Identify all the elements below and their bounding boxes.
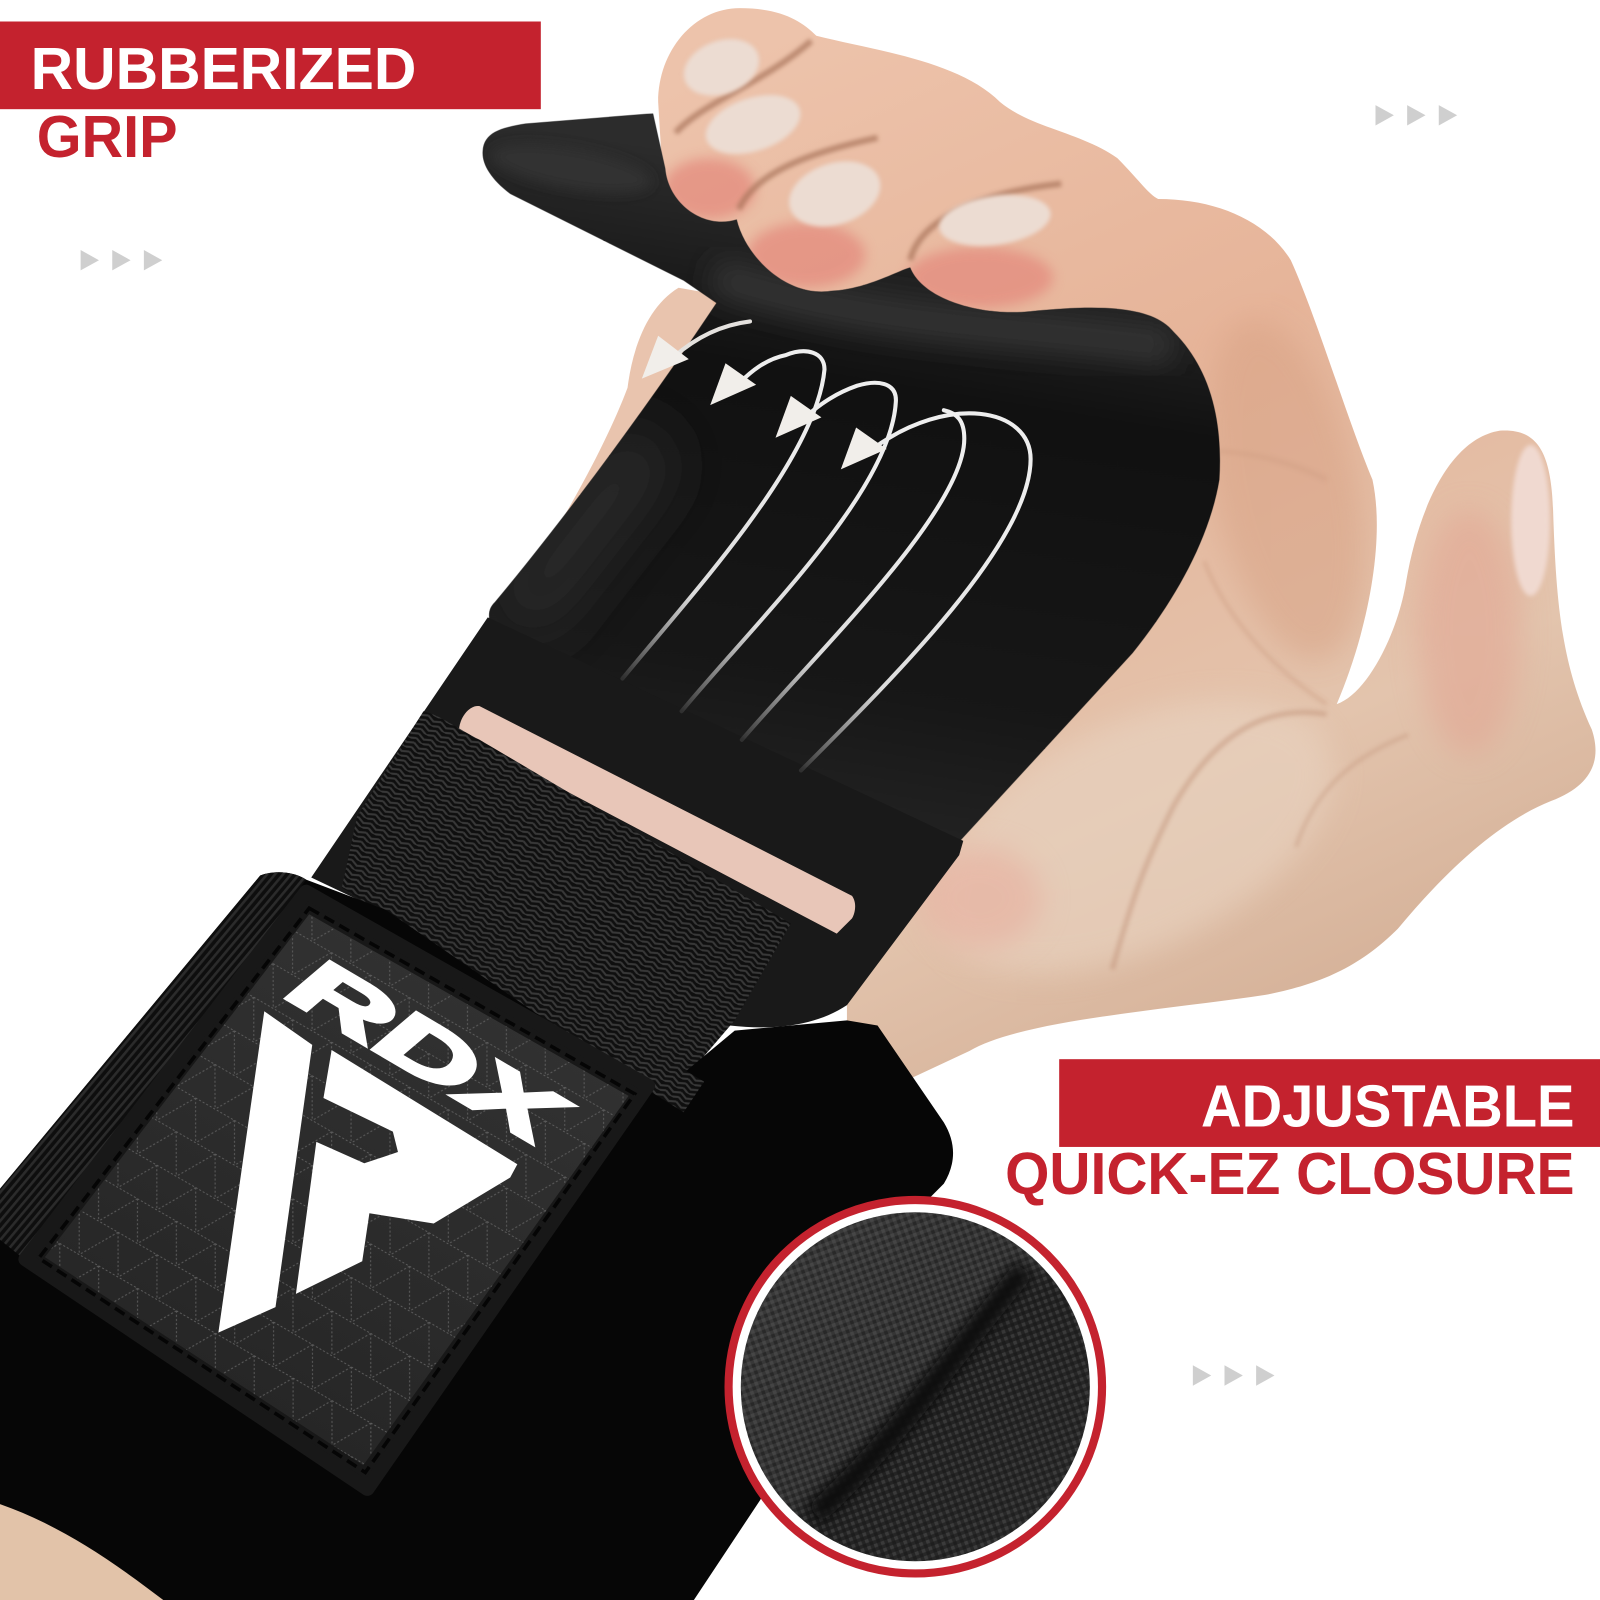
decorative triangles left <box>81 250 162 270</box>
patch face <box>45 914 629 1465</box>
banner text: RUBBERIZED <box>31 35 416 102</box>
decorative triangles bottom right <box>1193 1365 1274 1386</box>
RDX logo patch <box>26 892 648 1489</box>
wrist wrap <box>0 872 953 1600</box>
logo wordmark: RDX <box>277 939 581 1166</box>
finger creases <box>676 41 1061 260</box>
fabric crease <box>815 1269 1024 1514</box>
wrap body <box>0 872 953 1600</box>
banner text: ADJUSTABLE <box>1201 1073 1574 1140</box>
hand and thumb <box>658 8 1596 1080</box>
logo shard <box>218 1011 312 1333</box>
buckle frame <box>311 617 963 1027</box>
curve 2 <box>682 383 896 711</box>
subheading text: QUICK-EZ CLOSURE <box>1005 1140 1574 1207</box>
pad highlights <box>487 134 1173 622</box>
curve 5 <box>673 321 750 357</box>
curve 3 <box>742 410 964 740</box>
stitching <box>39 908 635 1472</box>
fingers behind the pad <box>543 288 724 551</box>
skin shading <box>663 158 1520 1029</box>
heading: adjustable closure <box>1005 1059 1600 1207</box>
fingernails <box>676 29 1550 596</box>
fabric weave <box>741 1212 1090 1561</box>
elastic lower strap <box>342 880 704 1112</box>
red banner <box>1059 1059 1600 1147</box>
decorative triangles top right <box>1376 105 1457 126</box>
webbing strap <box>342 711 791 1092</box>
curve 4 <box>801 413 1031 770</box>
patch border <box>26 892 648 1489</box>
flex motion arrows <box>622 321 1031 770</box>
logo P <box>296 1050 517 1294</box>
elastic band <box>0 872 306 1260</box>
red banner <box>0 21 541 109</box>
heading: rubberized grip <box>0 21 541 170</box>
subheading text: GRIP <box>37 103 178 170</box>
wrist skin <box>0 1490 179 1600</box>
buckle slot <box>459 706 855 934</box>
inset fabric closeup <box>729 1200 1102 1573</box>
arrowheads <box>642 336 887 469</box>
pad body <box>483 113 1220 842</box>
red ring <box>729 1200 1102 1573</box>
rubberized grip pad <box>483 113 1220 842</box>
curve 1 <box>622 351 824 679</box>
fabric face <box>741 1212 1090 1561</box>
patch texture <box>45 914 629 1465</box>
hand photo <box>543 8 1596 1080</box>
